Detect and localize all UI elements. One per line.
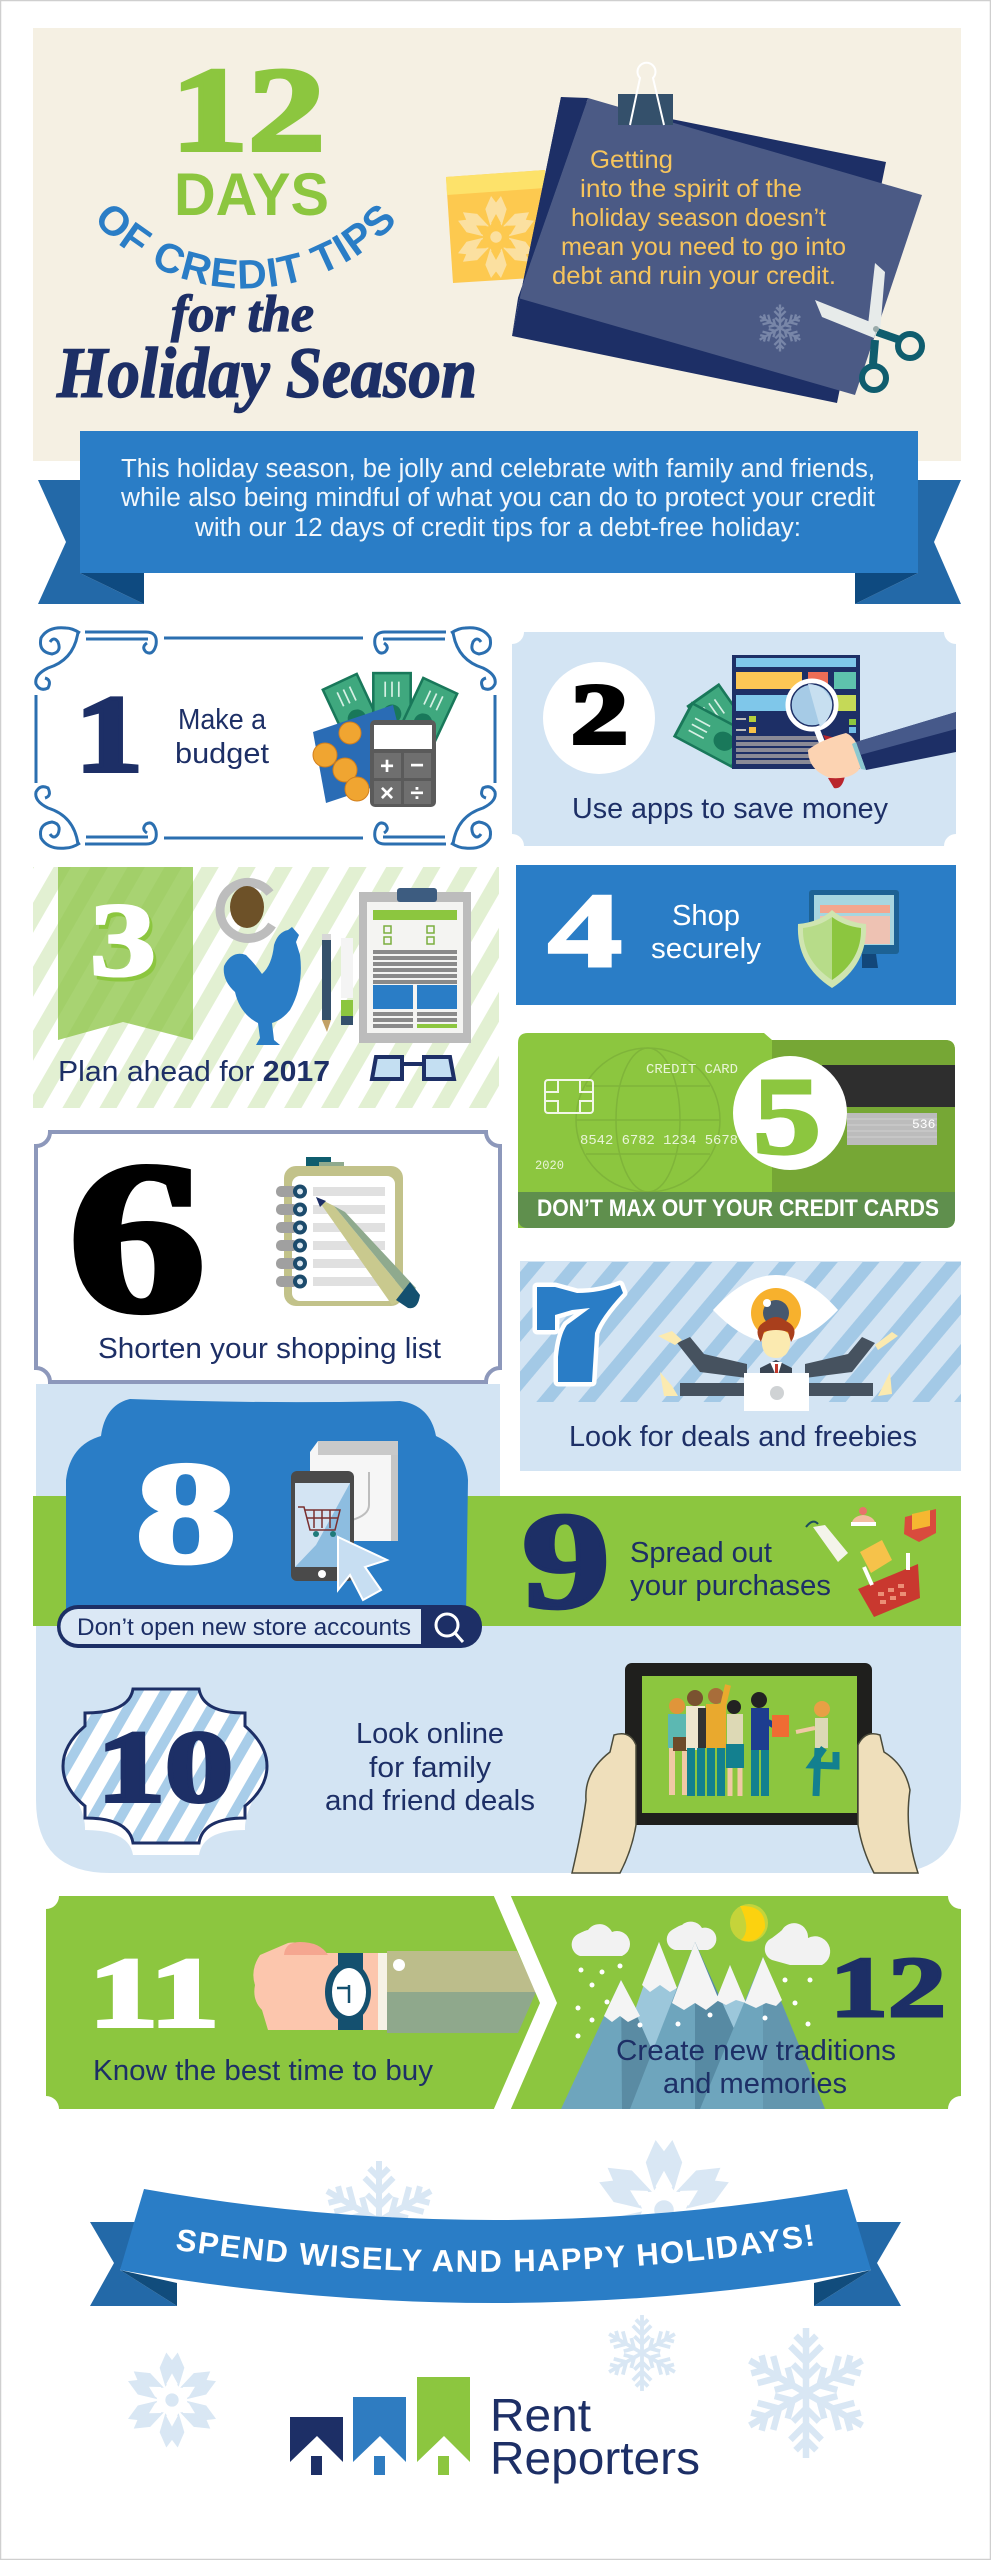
- banner text: This holiday season, be jolly and celebrate with family and friends,: [121, 455, 875, 483]
- icon: clouds: [572, 1922, 830, 1965]
- card text: 2020: [535, 1158, 564, 1173]
- panel: hero: [33, 28, 961, 461]
- icon: moon: [730, 1904, 768, 1942]
- note text: mean you need to go into: [561, 233, 846, 261]
- title: OF CREDIT TIPS: [99, 206, 394, 289]
- icon: yellow note: [446, 170, 548, 283]
- title: for the: [171, 286, 314, 343]
- icon: right hand: [858, 1734, 918, 1873]
- title: [56, 43, 477, 414]
- icon: money, card, coins and calculator: ÷: [410, 780, 424, 807]
- logo: Rent Reporters: [290, 2377, 700, 2484]
- closing message: SPEND WISELY AND HAPPY HOLIDAYS!: [176, 2224, 813, 2272]
- icon: money, card, coins and calculator: −: [410, 752, 424, 779]
- icon: search: [436, 1614, 463, 1642]
- tips 11 and 12 panel: [46, 1894, 961, 2111]
- tip 11 label: Know the best time to buy: [93, 2055, 434, 2087]
- tip 10 label: Look online: [356, 1718, 504, 1750]
- number 8: 8: [135, 1432, 237, 1594]
- number 6: 6: [68, 1118, 206, 1357]
- tip 7 panel: [520, 1261, 961, 1471]
- icon: bag, phone and cursor: [291, 1441, 398, 1600]
- tip 4 label: Shop: [672, 900, 740, 932]
- icon: money, card, coins and calculator: ×: [380, 780, 394, 807]
- icon: rooster: [224, 927, 301, 1045]
- title: 12: [171, 43, 325, 176]
- note papers: [512, 97, 922, 403]
- number 2 badge: 2: [571, 666, 628, 762]
- tip 9 label: [630, 1537, 831, 1602]
- number 2 badge: [543, 662, 655, 774]
- tip 5 panel: credit card: 536: [912, 1117, 935, 1132]
- note text: Getting: [590, 146, 673, 174]
- tip 2 label: Use apps to save money: [572, 793, 888, 825]
- number 4: 4: [548, 872, 622, 989]
- icon: money, card, coins and calculator: +: [380, 753, 394, 780]
- icon: person with four arms: [658, 1317, 898, 1411]
- logo wordmark: Reporters: [490, 2432, 700, 2484]
- number 9: 9: [522, 1484, 610, 1637]
- icon: pencil and eraser: [322, 934, 353, 1032]
- tip 4 panel: [516, 865, 956, 1005]
- card text: [535, 1062, 738, 1173]
- note text: debt and ruin your credit.: [552, 262, 836, 290]
- note text: into the spirit of the: [580, 175, 802, 203]
- tip 6 panel: [36, 1118, 500, 1382]
- card text: CREDIT CARD: [646, 1062, 738, 1078]
- number 12: 12: [830, 1939, 946, 2035]
- number 5 badge: 5: [753, 1055, 821, 1177]
- tip 2 panel: [512, 632, 956, 846]
- icon: glasses: [372, 1057, 454, 1079]
- tip 10 label: for family: [369, 1752, 492, 1784]
- icon: snowy mountains: [561, 1942, 825, 2109]
- banner text: with our 12 days of credit tips for a debt-free holiday:: [194, 514, 801, 542]
- green band: [33, 1496, 961, 1626]
- icon: binder clip: [618, 63, 673, 125]
- white chevron divider: [493, 1894, 557, 2111]
- tip 10 label: and friend deals: [325, 1785, 535, 1817]
- tip 9 panel: [522, 1484, 936, 1637]
- tip 1 label: [175, 704, 269, 770]
- tip 9 label: your purchases: [630, 1570, 831, 1602]
- tip 12 label: Create new traditions: [616, 2035, 896, 2067]
- tip 4 label: securely: [651, 933, 761, 965]
- icon: clipboard: [359, 888, 471, 1043]
- badge with number 10: [63, 1689, 267, 1855]
- tip 1 label: Make a: [178, 704, 267, 736]
- note text: [552, 146, 846, 290]
- tip 9 label: Spread out: [630, 1537, 772, 1569]
- ornate frame: [36, 628, 495, 848]
- icon: tablet: [625, 1663, 872, 1825]
- number 1: 1: [75, 673, 143, 795]
- tip 7 label: Look for deals and freebies: [569, 1421, 917, 1453]
- banner: intro ribbon: [38, 431, 961, 604]
- bookmark with number 3: 3: [93, 885, 159, 1002]
- tip 3 panel: [33, 867, 499, 1108]
- tip 8 panel: [57, 1399, 482, 1648]
- icon: magnifier and hand: [788, 681, 956, 788]
- icon: shield and monitor: [798, 890, 899, 988]
- tip 6 label: Shorten your shopping list: [98, 1333, 441, 1365]
- decorative snowflakes: [125, 2140, 870, 2458]
- number 7: [537, 1285, 623, 1382]
- icon: eye: [713, 1275, 838, 1343]
- bookmark with number 3: 3: [90, 881, 156, 998]
- logo wordmark: Rent: [490, 2389, 591, 2441]
- card chip: [545, 1080, 593, 1113]
- icon: scissors: [815, 263, 922, 390]
- card text: 8542 6782 1234 5678: [580, 1133, 738, 1149]
- number 5 badge: [733, 1055, 847, 1177]
- badge with number 10: 10: [97, 1711, 233, 1824]
- tip 10 panel: [63, 1663, 918, 1873]
- tip 5 label: DON’T MAX OUT YOUR CREDIT CARDS: [537, 1195, 939, 1222]
- banner text: [120, 455, 875, 542]
- bookmark with number 3: [58, 867, 193, 1040]
- light blue background panel: [36, 1384, 961, 1873]
- tip 12 label: and memories: [663, 2068, 847, 2100]
- tip 1 panel: [36, 628, 495, 848]
- tip 1 label: budget: [175, 738, 269, 770]
- icon: notebook and pencil: [276, 1157, 420, 1308]
- closing ribbon: [90, 2189, 901, 2306]
- title: DAYS: [174, 161, 329, 228]
- icon: hand with watch: [253, 1942, 536, 2033]
- icon: gifts and basket: [806, 1507, 936, 1617]
- icon: coffee cup: [220, 882, 272, 938]
- icon: app screen: [732, 655, 860, 769]
- tip 5 panel: credit card: [518, 1033, 955, 1228]
- note text: holiday season doesn’t: [571, 204, 826, 232]
- logo wordmark: [490, 2389, 700, 2484]
- tip 10 label: [325, 1718, 535, 1817]
- number 11: 11: [89, 1939, 219, 2048]
- banner text: while also being mindful of what you can do to protect your credit: [120, 484, 875, 512]
- tip 12 label: [616, 2035, 896, 2100]
- title: Holiday Season: [56, 333, 477, 413]
- icon: money: [675, 685, 756, 767]
- search bar: [57, 1605, 482, 1648]
- search bar: Don’t open new store accounts: [77, 1614, 411, 1641]
- icon: money, card, coins and calculator: [313, 673, 457, 807]
- tip 4 label: [651, 900, 761, 965]
- icon: left hand: [572, 1734, 636, 1873]
- icon: group of people: [668, 1685, 836, 1796]
- tip 3 label: Plan ahead for 2017: [58, 1056, 330, 1088]
